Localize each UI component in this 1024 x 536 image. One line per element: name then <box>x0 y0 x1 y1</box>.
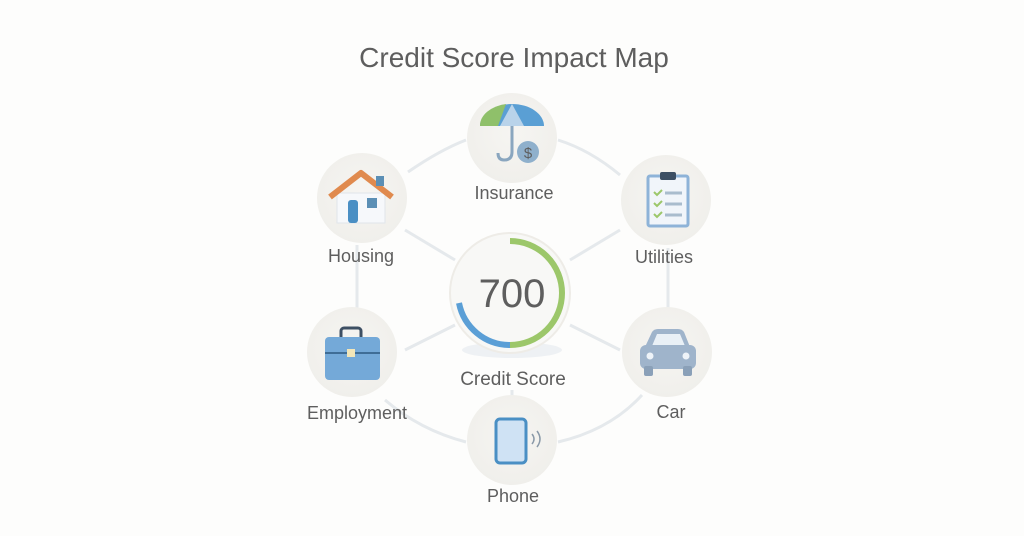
center: credit score gauge <box>450 233 570 358</box>
node: phone: Phone <box>487 486 539 506</box>
label: credit score: Credit Score <box>460 369 566 390</box>
node: car: Car <box>656 402 686 422</box>
node: insurance: Insurance <box>474 183 554 203</box>
node: employment: Employment <box>307 403 407 423</box>
node: insurance <box>467 93 557 203</box>
node: phone <box>467 395 557 506</box>
node: housing: Housing <box>328 246 394 266</box>
node: utilities: Utilities <box>635 247 693 267</box>
node: housing <box>317 153 407 266</box>
node: insurance: $ <box>524 145 533 162</box>
node: utilities <box>621 155 711 267</box>
title: Credit Score Impact Map <box>359 42 669 73</box>
node: car <box>622 307 712 422</box>
center: credit score gauge: 700 <box>479 272 545 316</box>
node: employment <box>307 307 407 423</box>
